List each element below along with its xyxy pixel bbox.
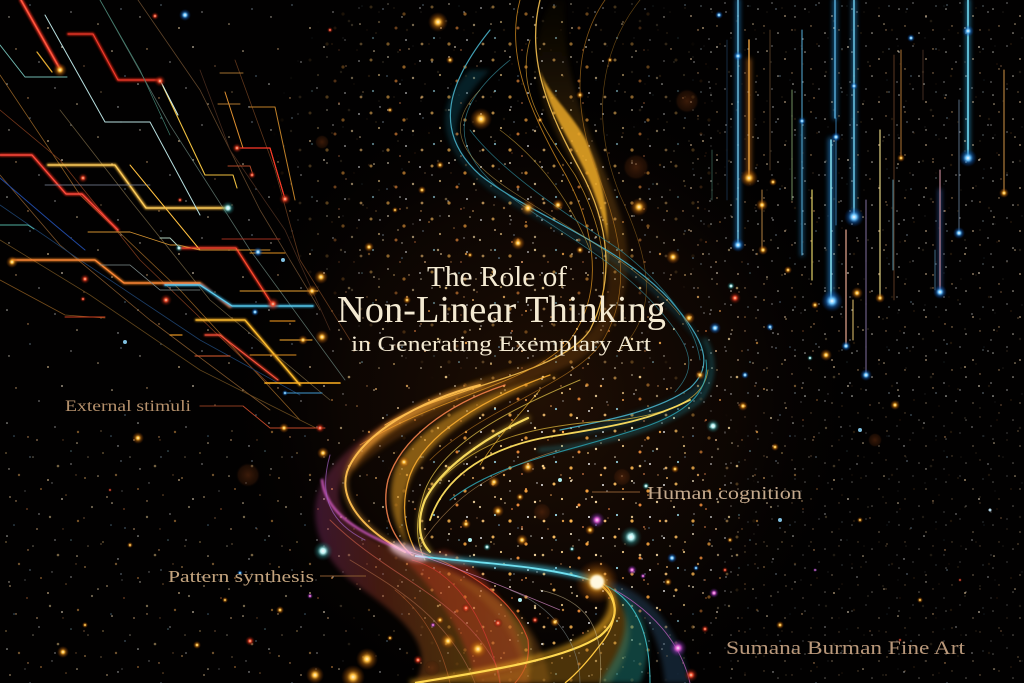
label: Sumana Burman Fine Art: Sumana Burman Fine Art <box>726 638 966 659</box>
teal and blue stars <box>123 9 992 602</box>
label: External stimuli: External stimuli <box>65 398 192 415</box>
thin trailing lines <box>0 0 350 430</box>
red and orange trace glow <box>0 0 313 385</box>
title line 2: Non-Linear Thinking <box>337 289 666 331</box>
falling light streaks: upper right <box>712 0 1004 375</box>
ribbon: cyan and yellow loop at bottom right <box>410 552 690 683</box>
bright trace cores <box>0 0 340 428</box>
ribbon crossing glow <box>387 539 619 604</box>
circuit node highlights <box>6 63 329 444</box>
ribbon: lower left warm swirl <box>315 365 560 683</box>
circuit lines: left stream <box>0 0 350 430</box>
ribbon: upper thin strands <box>360 0 704 460</box>
ribbon: upper gold band <box>345 0 708 480</box>
title block <box>337 262 666 356</box>
ribbon: yellow upper right sweep <box>430 340 712 520</box>
falling light streak heads <box>709 11 1009 381</box>
teal and white traces <box>0 0 237 290</box>
label: Human cognition: Human cognition <box>647 483 802 503</box>
right side traces <box>218 73 295 200</box>
title line 3: in Generating Exemplary Art <box>351 331 651 356</box>
ribbon: golden and magenta strands <box>322 375 580 683</box>
dim nebula orbs <box>236 89 882 676</box>
label: Pattern synthesis: Pattern synthesis <box>168 567 314 586</box>
title line 1: The Role of <box>427 262 568 293</box>
